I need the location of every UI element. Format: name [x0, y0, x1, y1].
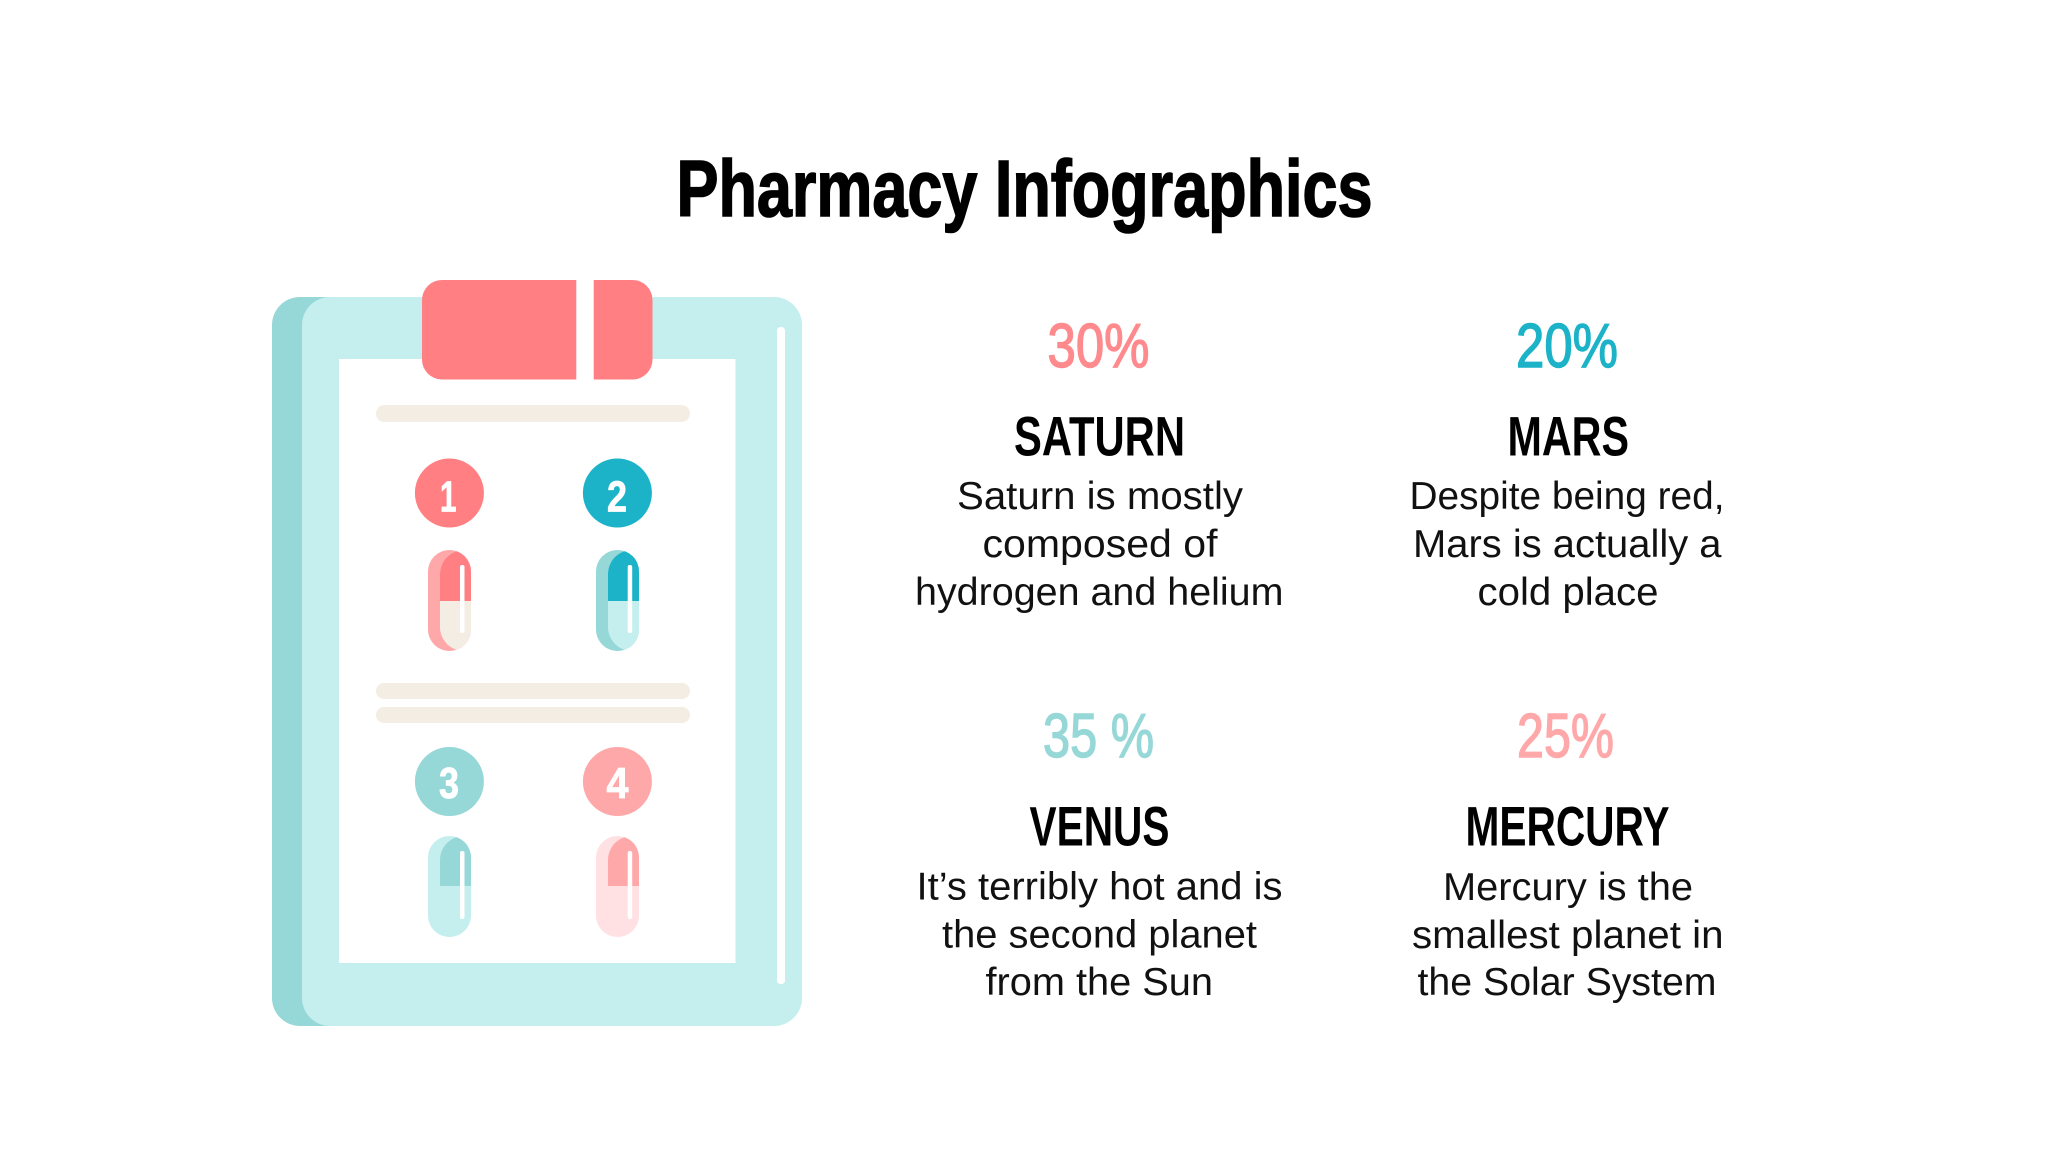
- heading Venus: VENUS: [1030, 794, 1170, 858]
- description Venus: [916, 866, 1282, 1004]
- description Saturn: [915, 475, 1284, 614]
- description Venus: It’s terribly hot and is: [916, 866, 1282, 908]
- description Saturn: hydrogen and helium: [915, 571, 1284, 614]
- badge 3: [415, 747, 484, 816]
- badge 3: 3: [439, 759, 459, 808]
- percentage 20%: 20%: [1516, 312, 1618, 381]
- badge 1: 1: [440, 472, 456, 522]
- badge 1: [415, 458, 484, 528]
- badge 2: [583, 458, 652, 528]
- description Mercury: [1412, 866, 1724, 1004]
- percentage 35%: 35 %: [1043, 702, 1154, 771]
- description Mars: Mars is actually a: [1413, 523, 1722, 566]
- badge 4: [583, 747, 652, 816]
- panel: Mars: [1410, 312, 1724, 614]
- title: Pharmacy Infographics: [676, 144, 1372, 233]
- description Venus: from the Sun: [986, 961, 1213, 1004]
- capsule 2: [596, 550, 639, 651]
- description Mars: Despite being red,: [1410, 475, 1724, 518]
- description Mars: cold place: [1478, 571, 1658, 614]
- panel: clipboard illustration: [272, 280, 802, 1026]
- percentage 30%: 30%: [1048, 312, 1150, 381]
- heading Mars: MARS: [1508, 404, 1629, 468]
- description Saturn: Saturn is mostly: [957, 475, 1244, 518]
- capsule 1: [428, 550, 471, 651]
- description Mars: [1410, 475, 1724, 614]
- description Saturn: composed of: [982, 523, 1218, 566]
- text line placeholder lower: [376, 707, 690, 723]
- clipboard clip: [422, 280, 652, 380]
- capsule 3: [428, 836, 471, 937]
- panel: Saturn: [915, 312, 1284, 614]
- text line placeholder middle: [376, 683, 690, 699]
- percentage 25%: 25%: [1517, 702, 1614, 771]
- description Mercury: Mercury is the: [1443, 866, 1693, 909]
- badge 2: 2: [607, 472, 627, 522]
- text line placeholder top: [376, 405, 690, 422]
- heading Mercury: MERCURY: [1466, 794, 1670, 858]
- paper sheet: [339, 359, 736, 963]
- heading Saturn: SATURN: [1014, 404, 1185, 468]
- badge 4: 4: [606, 759, 629, 808]
- panel: Venus: [916, 702, 1282, 1004]
- description Mercury: the Solar System: [1418, 961, 1716, 1004]
- clipboard board: [272, 297, 802, 1026]
- description Mercury: smallest planet in: [1412, 914, 1724, 957]
- panel: Mercury: [1412, 702, 1724, 1004]
- capsule 4: [596, 836, 639, 937]
- description Venus: the second planet: [942, 914, 1257, 956]
